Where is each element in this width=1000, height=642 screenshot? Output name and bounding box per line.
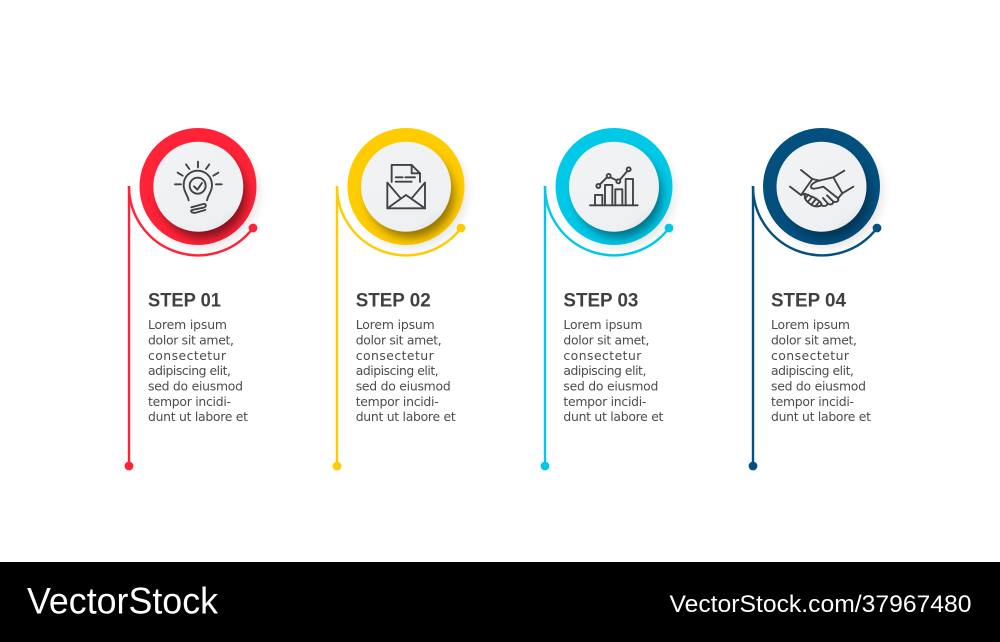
heading: step 04: STEP 04 <box>771 290 846 312</box>
panel: step 4 <box>749 128 883 470</box>
footer bar <box>0 562 1000 642</box>
text block: step 03 description <box>563 317 664 424</box>
text block: step 01 description: adipiscing elit, <box>148 363 231 378</box>
text block: step 02 description: tempor incidi- <box>356 394 439 409</box>
cyan ring with inner disc <box>556 128 675 248</box>
footer image reference: VectorStock.com/37967480 <box>670 591 972 618</box>
text block: step 04 description: sed do eiusmod <box>771 378 866 394</box>
text block: step 02 description: dolor sit amet, <box>356 332 442 348</box>
text block: step 01 description: Lorem ipsum <box>148 317 227 332</box>
text block: step 03 description: dunt ut labore et <box>563 409 664 424</box>
panel: step 1 <box>125 128 259 470</box>
text block: step 01 description: sed do eiusmod <box>148 378 243 394</box>
text block: step 01 description: dolor sit amet, <box>148 332 234 348</box>
text block: step 01 description: dunt ut labore et <box>148 409 248 424</box>
text block: step 04 description: consectetur <box>771 348 850 363</box>
text block: step 04 description: tempor incidi- <box>771 394 854 409</box>
panel: step 2 <box>333 128 467 470</box>
text block: step 04 description: Lorem ipsum <box>771 317 850 332</box>
footer logo text: VectorStock <box>27 580 218 622</box>
heading: step 01: STEP 01 <box>148 290 221 312</box>
text block: step 03 description: Lorem ipsum <box>563 317 642 332</box>
icon: light bulb with check mark <box>175 162 222 213</box>
text block: step 02 description: dunt ut labore et <box>356 409 456 424</box>
panel: step 3 <box>541 128 675 470</box>
text block: step 03 description: dolor sit amet, <box>563 332 649 348</box>
text block: step 01 description: tempor incidi- <box>148 394 231 409</box>
text block: step 02 description: sed do eiusmod <box>356 378 451 394</box>
connector: arc and vertical line <box>125 186 257 470</box>
connector: arc and vertical line <box>541 186 673 470</box>
text block: step 01 description <box>148 317 248 424</box>
text block: step 02 description: Lorem ipsum <box>356 317 435 332</box>
text block: step 02 description: adipiscing elit, <box>356 363 439 378</box>
text block: step 01 description: consectetur <box>148 348 227 363</box>
navy ring with inner disc <box>763 128 883 248</box>
text block: step 04 description: adipiscing elit, <box>771 363 854 378</box>
connector: arc and vertical line <box>333 186 465 470</box>
text block: step 03 description: consectetur <box>563 348 642 363</box>
text block: step 03 description: adipiscing elit, <box>563 363 646 378</box>
icon: bar chart with trend line <box>590 167 638 205</box>
yellow ring with inner disc <box>348 128 467 248</box>
icon: envelope with document <box>387 165 425 208</box>
text block: step 04 description <box>771 317 871 424</box>
text block: step 02 description <box>356 317 456 424</box>
text block: step 02 description: consectetur <box>356 348 435 363</box>
text block: step 04 description: dolor sit amet, <box>771 332 857 348</box>
heading: step 03: STEP 03 <box>563 290 639 312</box>
text block: step 03 description: tempor incidi- <box>563 394 646 409</box>
icon: handshake <box>790 170 853 206</box>
heading: step 02: STEP 02 <box>356 290 431 312</box>
text block: step 04 description: dunt ut labore et <box>771 409 871 424</box>
red ring with inner disc <box>140 128 259 248</box>
text block: step 03 description: sed do eiusmod <box>563 378 658 394</box>
connector: arc and vertical line <box>749 186 881 470</box>
